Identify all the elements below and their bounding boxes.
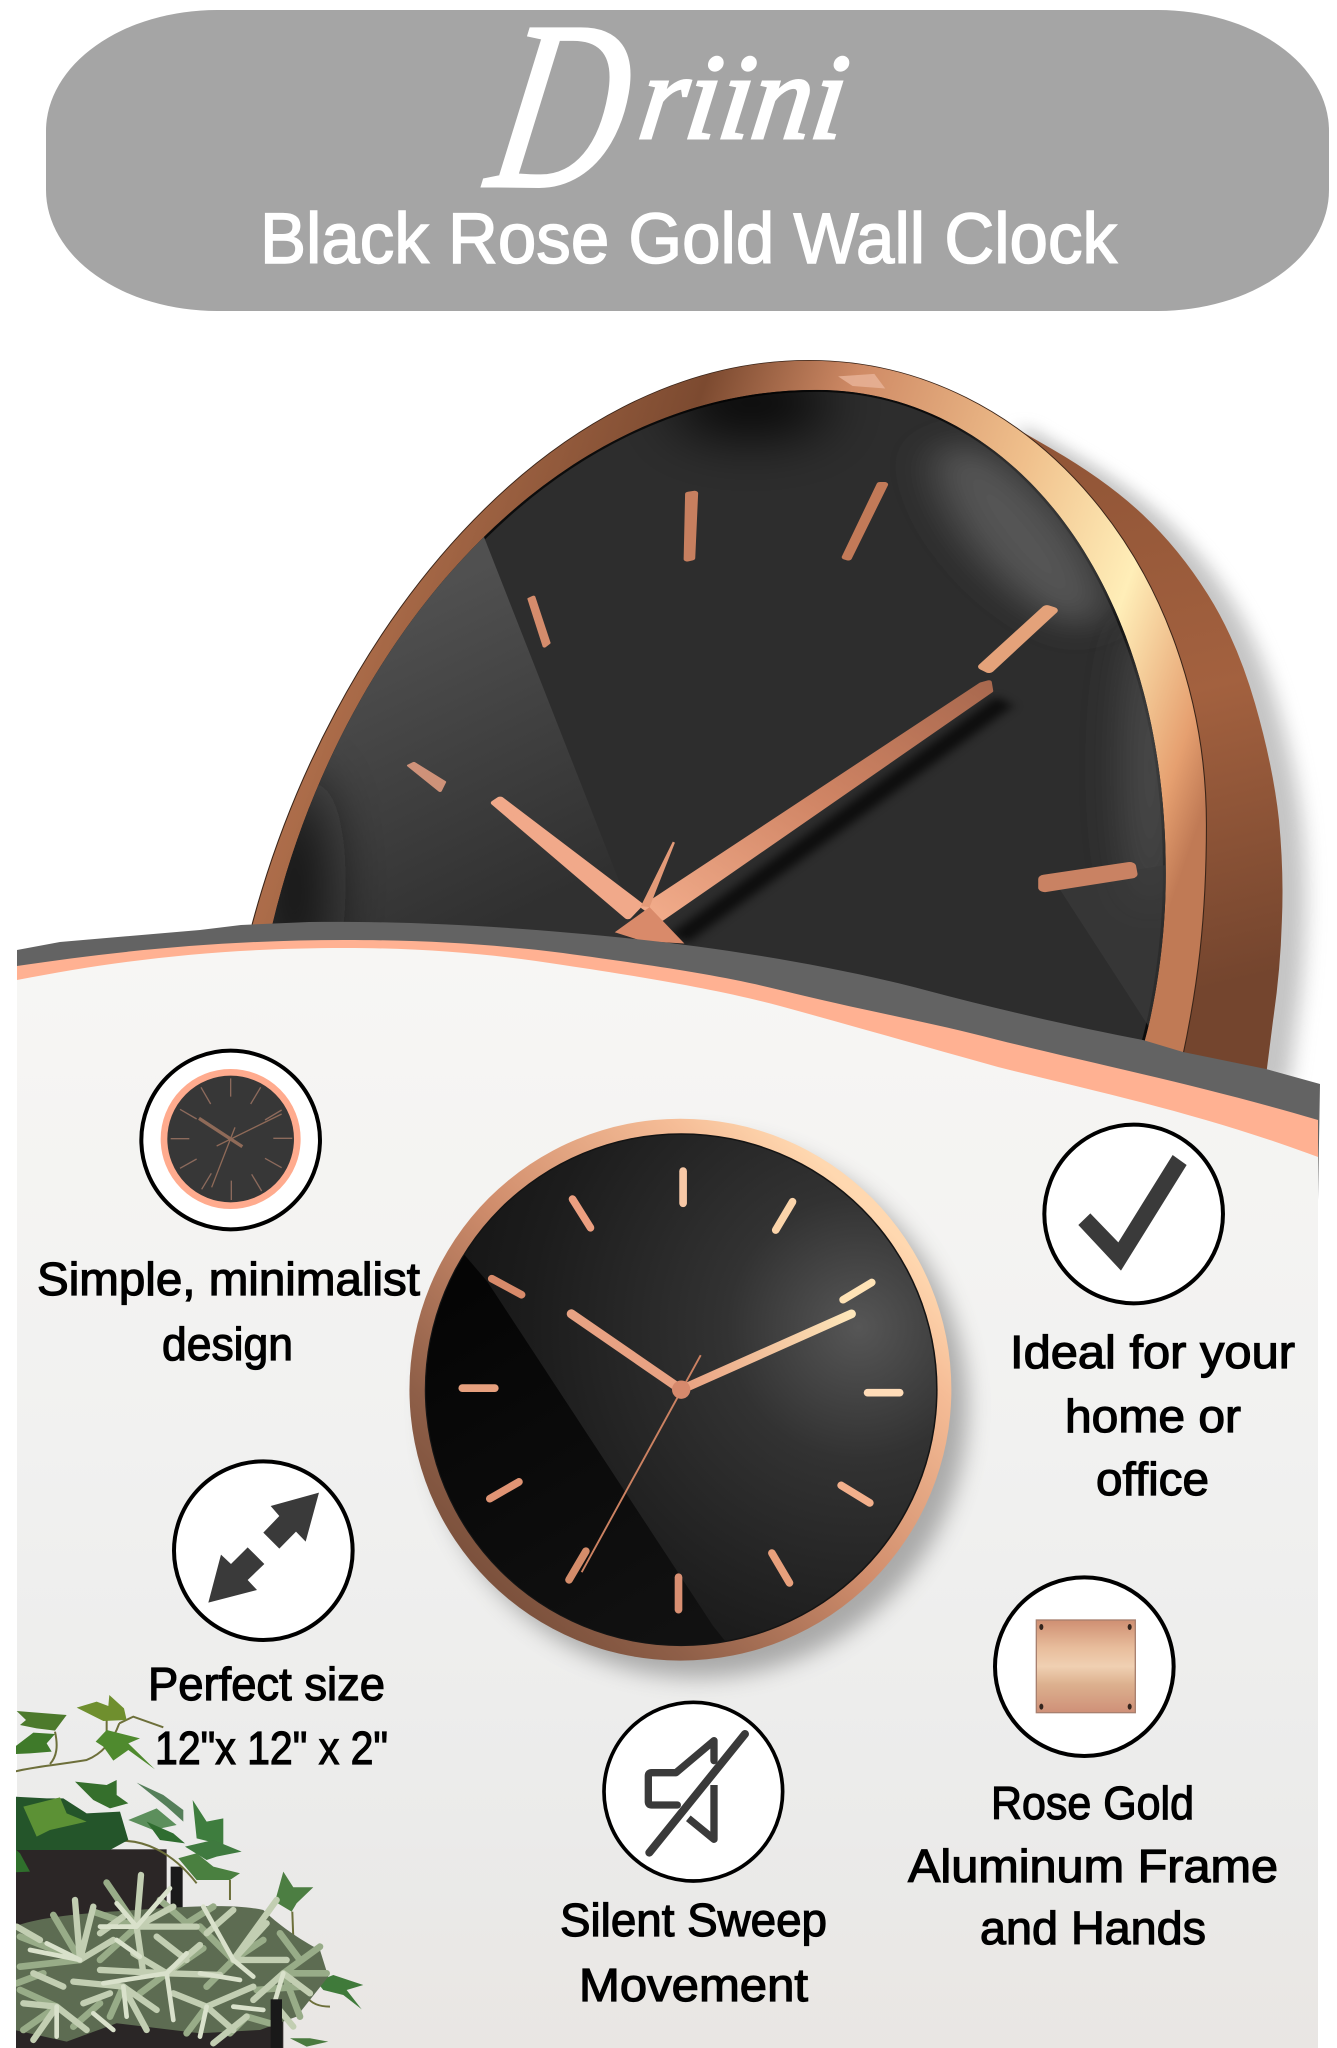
icon: check mark (1044, 1125, 1223, 1303)
label line 3: office (1096, 1453, 1209, 1505)
tick 9 (462, 1378, 495, 1398)
feature: perfect size (148, 1461, 388, 1774)
dial right glow (1125, 621, 1175, 912)
label line 2: 12"x 12" x 2" (155, 1722, 388, 1774)
succulent leaves: light (17, 1875, 310, 2043)
clock back body (998, 418, 1283, 1077)
icon circle (995, 1577, 1174, 1756)
tick 12 (673, 1171, 693, 1203)
minute hand (681, 1314, 851, 1390)
feature: rose gold frame (908, 1577, 1278, 1954)
feature: ideal for home or office (1010, 1125, 1295, 1505)
tick 3 (868, 1383, 900, 1403)
plate (1036, 1620, 1135, 1713)
mini clock hour hand (199, 1118, 242, 1147)
icon circle (1044, 1125, 1223, 1303)
plate screws (1039, 1624, 1132, 1710)
tick 10 (492, 1279, 522, 1295)
leaf group upper (17, 1711, 67, 1731)
check (1078, 1155, 1187, 1271)
banner pill (46, 10, 1329, 311)
dial dark edge bottom-left (262, 776, 327, 989)
tick 4 (841, 1485, 870, 1503)
tick 5 (772, 1553, 789, 1583)
large angled clock (200, 360, 1306, 1116)
label line 1: Simple, minimalist (37, 1253, 420, 1305)
mini clock ticks (171, 1078, 292, 1200)
cast shadow on wall (1021, 423, 1306, 1083)
tick 2 (843, 1282, 872, 1300)
label line 3: and Hands (980, 1902, 1206, 1954)
tick 6 (669, 1577, 689, 1610)
hands (494, 682, 990, 943)
icon circle (141, 1051, 320, 1229)
center hub (672, 1380, 690, 1399)
label line 1: Ideal for your (1010, 1326, 1295, 1378)
leaf group lower (317, 1975, 363, 2009)
wave band: peach (17, 940, 1318, 1250)
label line 1: Silent Sweep (560, 1894, 827, 1946)
minute hand shadow (679, 701, 1005, 939)
label line 1: Rose Gold (991, 1777, 1194, 1829)
label line 2: Movement (579, 1959, 808, 2011)
tick 7 (569, 1551, 586, 1580)
dial base (272, 390, 1166, 1041)
label (37, 1253, 420, 1370)
tick 8 (490, 1482, 519, 1499)
speaker upper (648, 1741, 714, 1805)
label (148, 1658, 388, 1774)
icon: mini clock (141, 1051, 320, 1229)
dial dark wedge (426, 1255, 724, 1644)
icon: muted speaker (604, 1702, 783, 1881)
arrow up-right (263, 1493, 319, 1549)
rim inner edge (425, 1133, 938, 1646)
label (1010, 1326, 1295, 1505)
succulent leaves: highlight (30, 1888, 283, 2037)
icon circle (174, 1461, 353, 1640)
ivy leaves (14, 1695, 363, 2047)
label (560, 1894, 827, 2011)
second hand (641, 842, 675, 907)
succulent shadow mass (14, 1906, 328, 2042)
rim highlight (838, 374, 885, 388)
tick 1 (845, 484, 884, 558)
hour markers (409, 484, 1131, 888)
dial left reflection wedge (272, 537, 594, 924)
rim (409, 1119, 951, 1661)
potted plants (14, 1695, 363, 2048)
tick 11 (529, 597, 549, 646)
black dial (272, 390, 1166, 1041)
dial top shadow (671, 374, 831, 432)
tick 2 (983, 609, 1053, 670)
label (908, 1777, 1278, 1954)
label line 1: Perfect size (148, 1658, 385, 1710)
clock shadow (428, 1138, 967, 1677)
dial upper right glow (920, 430, 1119, 632)
hour hand (494, 799, 639, 917)
center hub (615, 907, 684, 943)
tick 1 (776, 1202, 793, 1230)
tick 12 (687, 493, 695, 559)
feature: silent sweep (560, 1702, 827, 2011)
title banner (46, 0, 1329, 311)
textured wall panel (17, 948, 1318, 2048)
arrow down-left (208, 1547, 264, 1603)
lower planter (16, 2022, 284, 2048)
planter leg lower (271, 1999, 282, 2048)
hour ticks (462, 1171, 900, 1610)
label line 2: Aluminum Frame (908, 1840, 1278, 1892)
mini clock dial (164, 1072, 297, 1206)
planter stand leg (171, 1867, 183, 1910)
label line 2: home or (1065, 1390, 1241, 1442)
feature: simple design (37, 1051, 420, 1370)
front facing clock (409, 1119, 967, 1677)
brand logo Driini (472, 0, 856, 239)
speaker lower (688, 1785, 714, 1839)
icon: metal plate (995, 1577, 1174, 1756)
succulent leaves: mid (17, 1883, 327, 2033)
icon: diagonal arrows (174, 1461, 353, 1640)
slash (649, 1734, 745, 1853)
icon circle (604, 1702, 783, 1881)
ivy stems (14, 1717, 330, 2007)
upper planter (16, 1849, 167, 1925)
dial lower right wedge (1060, 865, 1166, 1026)
tick 3 (1045, 866, 1131, 888)
mini clock hands (212, 1114, 282, 1187)
hour hand (571, 1314, 681, 1390)
label line 2: design (162, 1318, 293, 1370)
logo lowercase: riini (632, 30, 856, 165)
minute hand (644, 682, 990, 919)
dial (426, 1135, 936, 1645)
wave band: grey (17, 922, 1320, 1200)
heading: product name: Black Rose Gold Wall Clock (260, 200, 1117, 279)
tick 11 (572, 1199, 590, 1228)
leaf group middle (14, 1797, 128, 1850)
tick 10 (409, 763, 444, 791)
rose gold rim (252, 360, 1206, 1116)
second hand (582, 1355, 701, 1572)
